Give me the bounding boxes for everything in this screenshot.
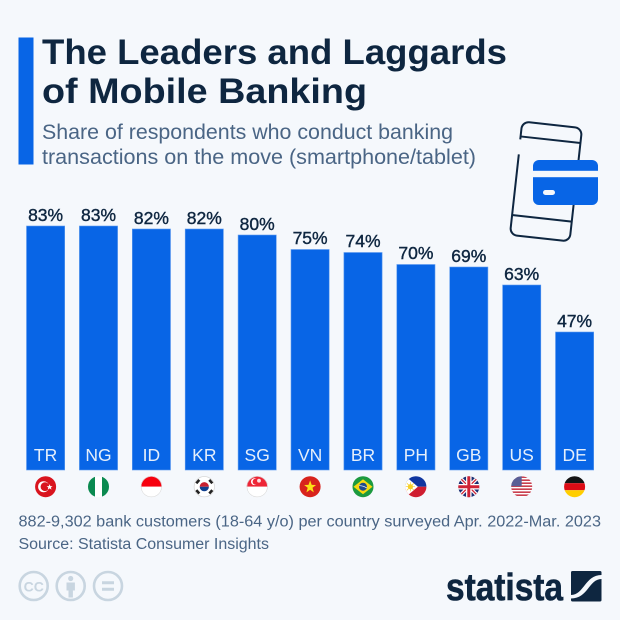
country codes: VN: [298, 445, 322, 465]
value labels: 82%: [187, 208, 222, 228]
country codes: NG: [85, 445, 112, 465]
icon: cc: CC: [24, 578, 44, 594]
country codes: SG: [245, 445, 270, 465]
value labels: 83%: [28, 205, 63, 225]
statista logo: statista: [446, 567, 564, 609]
icon: flag United Kingdom: [458, 476, 480, 498]
country codes: ID: [143, 445, 160, 465]
country codes: US: [510, 445, 534, 465]
icon: flag Vietnam: [300, 476, 321, 497]
icon: nd: [94, 572, 122, 600]
country codes: PH: [404, 445, 428, 465]
value labels: 47%: [557, 311, 592, 331]
icon: flag Germany: [564, 476, 586, 498]
country codes: GB: [456, 445, 481, 465]
value labels: 82%: [134, 208, 169, 228]
icon: flag Turkey: [35, 476, 56, 497]
subtitle: Share of respondents who conduct banking: [42, 120, 453, 144]
icon: phone with credit card: [510, 122, 598, 241]
icon: flag Singapore: [246, 476, 268, 498]
bars: [26, 226, 594, 470]
icon: flag Brazil: [352, 476, 374, 497]
value labels: 83%: [81, 205, 116, 225]
title: [42, 32, 507, 111]
icon: flag South Korea: [194, 476, 215, 497]
bar chart: [26, 205, 594, 470]
footnote and source: Source: Statista Consumer Insights: [18, 536, 269, 553]
country codes: DE: [562, 445, 587, 465]
value labels: [28, 205, 592, 331]
value labels: 63%: [504, 264, 539, 284]
title: The Leaders and Laggards: [42, 32, 507, 72]
icon: statista mark: [571, 571, 602, 602]
country codes: TR: [34, 445, 57, 465]
value labels: 75%: [293, 228, 328, 248]
title accent bar: [18, 38, 34, 164]
country codes: [34, 445, 587, 465]
country codes: BR: [351, 445, 375, 465]
value labels: 70%: [398, 243, 433, 263]
footnote and source: [18, 514, 601, 553]
subtitle: transactions on the move (smartphone/tablet): [42, 145, 476, 169]
icon: creative commons licence: [20, 572, 122, 600]
icon: by: [57, 572, 85, 600]
title: of Mobile Banking: [42, 71, 367, 111]
icon: flag United States: [511, 476, 533, 498]
value labels: 80%: [240, 214, 275, 234]
icon: flag Philippines: [405, 476, 427, 498]
value labels: 69%: [451, 246, 486, 266]
country codes: KR: [192, 445, 216, 465]
footnote and source: 882-9,302 bank customers (18-64 y/o) per country surveyed Apr. 2022-Mar. 2023: [18, 514, 601, 530]
value labels: 74%: [345, 231, 381, 251]
icon: flag Indonesia: [140, 476, 162, 498]
subtitle: [42, 120, 476, 169]
icon: flag Nigeria: [88, 476, 109, 497]
